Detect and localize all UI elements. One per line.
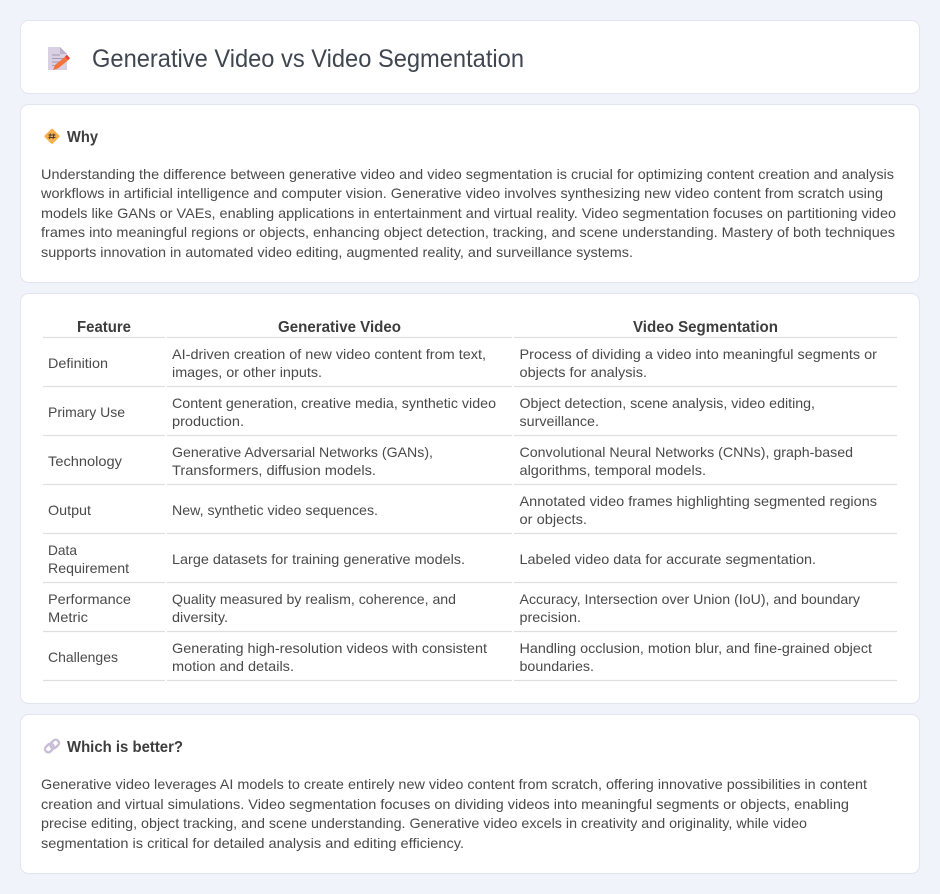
row: data requirement: Large datasets for training generative models. (172, 551, 465, 567)
row: technology: Technology (48, 453, 122, 469)
row: performance metric: precision. (520, 609, 581, 625)
icon: link (44, 738, 60, 754)
row: data requirement: Requirement (48, 560, 129, 576)
row: output: Annotated video frames highlighting segmented regions (520, 493, 877, 509)
row: technology: Generative Adversarial Networks (GANs), (172, 444, 433, 460)
row: primary use: production. (172, 413, 244, 429)
table header row: Video Segmentation (633, 319, 778, 336)
panel: title header (20, 20, 920, 94)
row: primary use: Primary Use (48, 404, 125, 420)
row: primary use: Content generation, creative media, synthetic video (172, 395, 496, 411)
row: technology: Transformers, diffusion models. (172, 462, 376, 478)
row: challenges: Challenges (48, 649, 118, 665)
text block: which is better paragraph: segmentation is critical for detailed analysis and editing efficiency. (41, 835, 464, 851)
row: performance metric (43, 591, 897, 632)
title: Generative Video vs Video Segmentation (92, 45, 524, 73)
text block: why paragraph: models like GANs or VAEs, enabling applications in entertainment and virtual reality. Video segmentation focuses on partitioning video (41, 205, 896, 221)
text block: which is better paragraph: creation and virtual simulations. Video segmentation focuses on dividing videos into meaningful segments or objects, enabling (41, 796, 849, 812)
row: output: or objects. (520, 511, 587, 527)
row: data requirement: Data (48, 542, 77, 558)
text block: why paragraph: Understanding the difference between generative video and video segmentation is crucial for optimizing content creation and analysis (41, 166, 894, 182)
row: challenges: Handling occlusion, motion blur, and fine-grained object (520, 640, 872, 656)
table header row: Feature (77, 319, 131, 336)
row: output (43, 493, 897, 534)
row: primary use (43, 395, 897, 436)
row: definition: images, or other inputs. (172, 364, 322, 380)
text block: which is better paragraph: precise editing, object tracking, and scene understanding. Generative video excels in creativity and originality, while video (41, 815, 807, 831)
row: performance metric: Performance (48, 591, 131, 607)
icon: memo with pencil (48, 47, 70, 70)
row: output: New, synthetic video sequences. (172, 502, 378, 518)
row: definition: Process of dividing a video into meaningful segments or (520, 346, 877, 362)
row: performance metric: Metric (48, 609, 88, 625)
text block: why paragraph: workflows in artificial intelligence and computer vision. Generative video involves synthesizing new video content from scratch using (40, 185, 883, 201)
row: performance metric: Accuracy, Intersection over Union (IoU), and boundary (520, 591, 860, 607)
text block: which is better paragraph (41, 776, 867, 851)
row: definition (43, 346, 897, 386)
panel: comparison table (20, 294, 920, 704)
row: technology: Convolutional Neural Networks (CNNs), graph-based (520, 444, 853, 460)
row: challenges: boundaries. (520, 658, 594, 674)
table header row: Generative Video (278, 319, 401, 336)
text block: why paragraph: frames into meaningful regions or objects, enhancing object detection, tracking, and scene understanding. Mastery of both techniques (41, 224, 895, 240)
table header row (43, 319, 897, 338)
row: definition: Definition (48, 355, 108, 371)
row: output: Output (48, 502, 91, 518)
icon: orange diamond (44, 128, 60, 144)
row: performance metric: diversity. (172, 609, 228, 625)
heading: which is better: Which is better? (67, 739, 183, 756)
row: challenges: Generating high-resolution videos with consistent (172, 640, 487, 656)
row: data requirement: Labeled video data for accurate segmentation. (520, 551, 816, 567)
row: challenges (43, 640, 897, 680)
row: definition: objects for analysis. (520, 364, 647, 380)
text block: why paragraph: supports innovation in automated video editing, augmented reality, and surveillance systems. (41, 244, 633, 260)
row: primary use: Object detection, scene analysis, video editing, (520, 395, 815, 411)
row: data requirement (43, 542, 897, 582)
panel: why (20, 104, 920, 282)
row: technology: algorithms, temporal models. (520, 462, 706, 478)
row: technology (43, 444, 897, 484)
text block: why paragraph (40, 166, 896, 260)
row: performance metric: Quality measured by realism, coherence, and (172, 591, 456, 607)
row: definition: AI-driven creation of new video content from text, (172, 346, 486, 362)
heading: why: Why (67, 129, 98, 146)
row: challenges: motion and details. (172, 658, 294, 674)
panel: which is better (20, 714, 920, 874)
row: primary use: surveillance. (520, 413, 599, 429)
text block: which is better paragraph: Generative video leverages AI models to create entirely new video content from scratch, offering innovative possibilities in content (41, 776, 867, 792)
